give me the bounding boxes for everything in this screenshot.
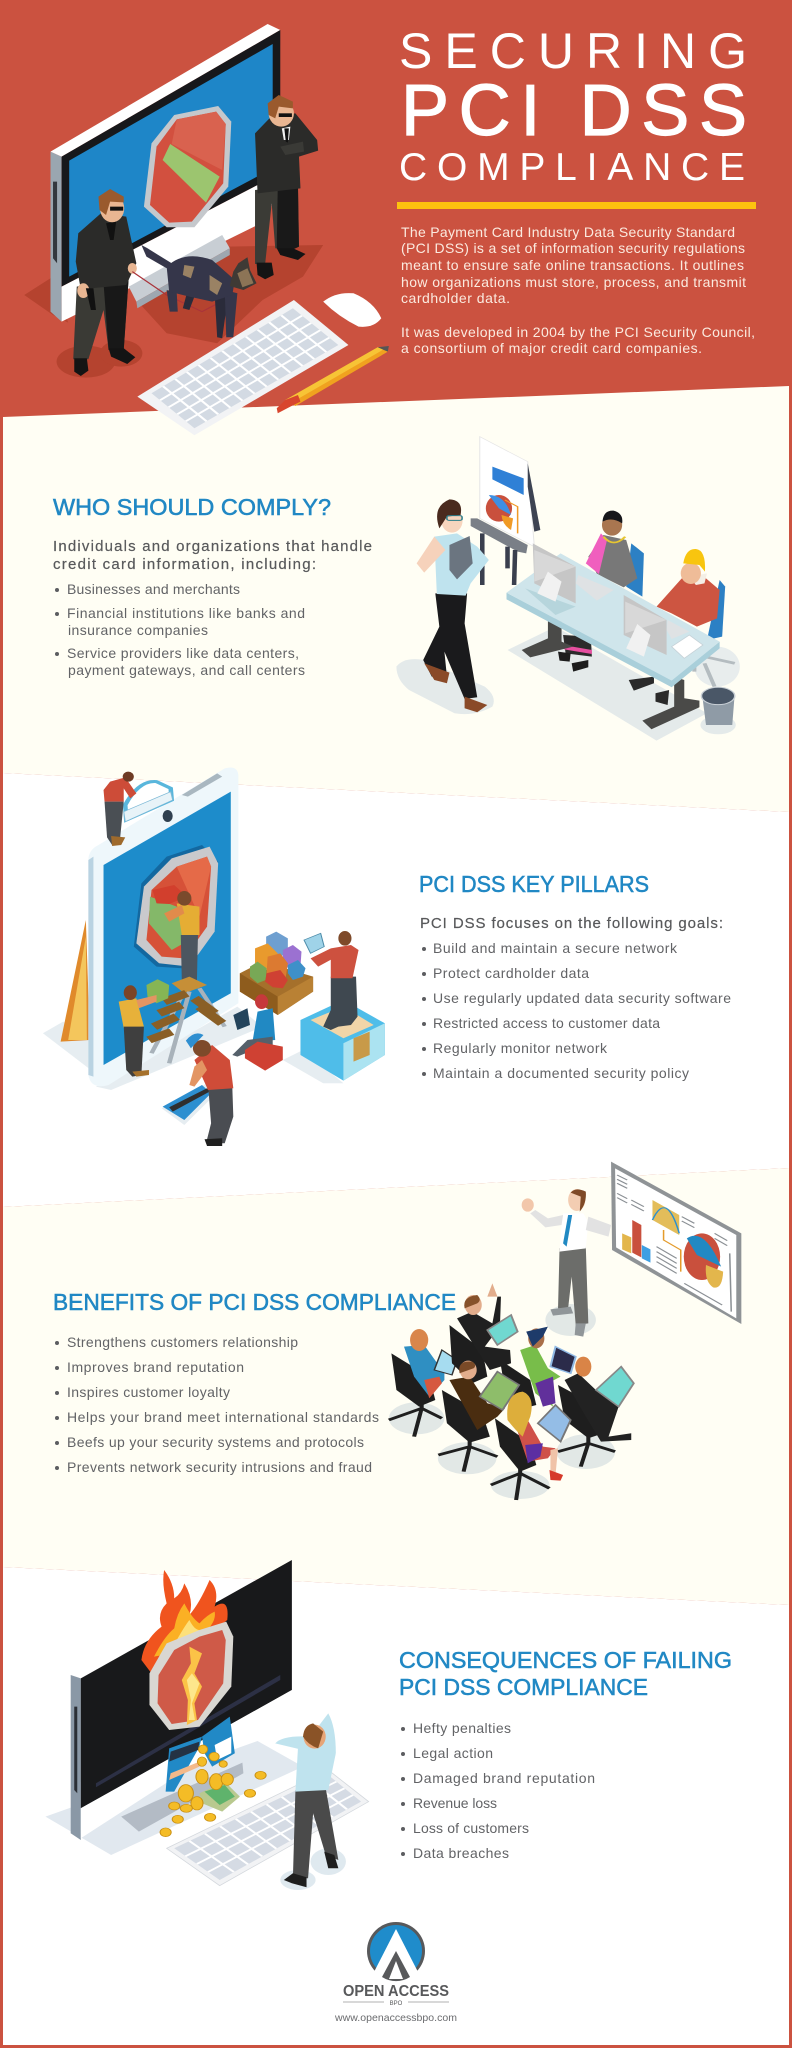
panel: who should comply background bbox=[3, 386, 789, 812]
credit card bbox=[163, 1085, 211, 1120]
monitor bbox=[71, 1560, 292, 1840]
heading: CONSEQUENCES OF FAILING bbox=[399, 1647, 732, 1673]
illustration: office team bbox=[396, 437, 740, 741]
logo mark bbox=[367, 1922, 425, 1984]
right guard bbox=[255, 95, 318, 279]
chairs behind desk bbox=[626, 543, 725, 640]
chair and person rear right bbox=[557, 1357, 634, 1469]
bullet list: Damaged brand reputation bbox=[413, 1770, 595, 1786]
title rule bbox=[397, 202, 756, 209]
monitor bbox=[50, 24, 280, 322]
pencil bbox=[277, 346, 389, 413]
bullet list: Regularly monitor network bbox=[433, 1040, 608, 1056]
subheading bbox=[53, 538, 372, 573]
illustration: burning shield monitor bbox=[45, 1560, 369, 1890]
bullet list bbox=[401, 1720, 595, 1861]
bullet list: Loss of customers bbox=[413, 1820, 529, 1836]
worker on block bbox=[300, 931, 385, 1081]
worried man bbox=[275, 1713, 346, 1890]
floor shadows bbox=[396, 627, 740, 741]
chair and person front left bbox=[389, 1329, 457, 1437]
heading: PCI DSS KEY PILLARS bbox=[419, 871, 649, 897]
heading: PCI DSS COMPLIANCE bbox=[399, 1674, 648, 1700]
stepladder bbox=[149, 977, 225, 1063]
bullet list bbox=[55, 1334, 379, 1475]
bullet list: Hefty penalties bbox=[413, 1720, 511, 1736]
bullet list: Beefs up your security systems and protocols bbox=[67, 1434, 364, 1450]
chair and person front bbox=[491, 1392, 571, 1500]
presentation board bbox=[611, 1162, 741, 1324]
section: key pillars text bbox=[419, 871, 731, 1081]
standing woman on phone bbox=[417, 499, 489, 712]
floor shadow bbox=[45, 1741, 303, 1855]
chair and person top bbox=[449, 1283, 518, 1383]
title: PCI DSS bbox=[401, 71, 747, 151]
desk monitors and keyboards bbox=[525, 543, 703, 658]
bullet list: Financial institutions like banks and bbox=[67, 605, 305, 621]
presenter bbox=[522, 1189, 611, 1337]
flip chart bbox=[471, 437, 540, 585]
title: COMPLIANCE bbox=[399, 146, 745, 189]
chair and person centre bbox=[438, 1361, 519, 1474]
box of cubes bbox=[240, 932, 313, 1015]
heading: WHO SHOULD COMPLY? bbox=[53, 494, 331, 520]
intro text bbox=[401, 224, 755, 356]
keyboard bbox=[167, 1770, 369, 1886]
bullet list bbox=[422, 940, 731, 1081]
waste bin bbox=[701, 687, 735, 725]
bullet list: Use regularly updated data security software bbox=[433, 990, 731, 1006]
left guard bbox=[73, 189, 137, 376]
intro text: meant to ensure safe online transactions. It outlines bbox=[401, 257, 744, 273]
subheading: PCI DSS focuses on the following goals: bbox=[420, 915, 723, 932]
mouse bbox=[323, 293, 381, 327]
easel bbox=[61, 920, 90, 1042]
shadows bbox=[24, 245, 323, 378]
subheading: Individuals and organizations that handle bbox=[53, 538, 372, 555]
team seated at laptops bbox=[389, 1283, 634, 1500]
shield bbox=[134, 845, 218, 968]
tablet bbox=[88, 767, 238, 1086]
flames bbox=[141, 1570, 228, 1673]
section: who should comply text bbox=[53, 494, 372, 678]
bullet list: Legal action bbox=[413, 1745, 493, 1761]
intro text: It was developed in 2004 by the PCI Security Council, bbox=[401, 324, 755, 340]
chair and person rear middle bbox=[500, 1327, 576, 1410]
section: consequences text bbox=[399, 1647, 732, 1861]
logo: Open Access BPO bbox=[334, 1922, 457, 2024]
bullet list: Prevents network security intrusions and fraud bbox=[67, 1459, 372, 1475]
worker on ladder bbox=[153, 885, 199, 983]
bullet list: Service providers like data centers, bbox=[67, 645, 299, 661]
bullet list: Build and maintain a secure network bbox=[433, 940, 678, 956]
illustration: presentation and team bbox=[389, 1162, 741, 1500]
title bbox=[399, 23, 747, 189]
intro text: cardholder data. bbox=[401, 290, 510, 306]
bullet list: Inspires customer loyalty bbox=[67, 1384, 230, 1400]
bullet list: Revenue loss bbox=[413, 1795, 497, 1811]
keyboard bbox=[137, 300, 348, 435]
bullet list: payment gateways, and call centers bbox=[68, 662, 305, 678]
bullet list: insurance companies bbox=[68, 622, 208, 638]
illustration: tablet construction team bbox=[43, 767, 385, 1146]
money and coins bbox=[160, 1745, 266, 1837]
heading bbox=[399, 1647, 732, 1700]
floor shadows bbox=[43, 1007, 343, 1125]
intro text: The Payment Card Industry Data Security Standard bbox=[401, 224, 735, 240]
bullet list: Strengthens customers relationship bbox=[67, 1334, 298, 1350]
section: benefits text bbox=[53, 1289, 456, 1475]
intro text: how organizations must store, process, and transmit bbox=[401, 274, 746, 290]
shield bbox=[144, 106, 231, 227]
bullet list bbox=[55, 581, 305, 678]
bullet list: Businesses and merchants bbox=[67, 581, 240, 597]
top worker with protractor bbox=[104, 772, 173, 846]
bullet list: Data breaches bbox=[413, 1845, 509, 1861]
cracked shield bbox=[149, 1622, 233, 1730]
seated worker with laptop bbox=[232, 994, 283, 1071]
bullet list: Helps your brand meet international standards bbox=[67, 1409, 379, 1425]
desk bbox=[507, 553, 720, 729]
website: www.openaccessbpo.com bbox=[334, 2012, 457, 2024]
bullet list: Restricted access to customer data bbox=[433, 1015, 660, 1031]
intro text: (PCI DSS) is a set of information security regulations bbox=[401, 240, 745, 256]
seated man bbox=[629, 549, 735, 705]
guard dog bbox=[132, 245, 257, 338]
bullet list: Maintain a documented security policy bbox=[433, 1065, 689, 1081]
title: SECURING bbox=[399, 23, 747, 79]
heading: BENEFITS OF PCI DSS COMPLIANCE bbox=[53, 1289, 456, 1315]
bullet list: Improves brand reputation bbox=[67, 1359, 244, 1375]
seated woman bbox=[558, 511, 637, 672]
panel: benefits background bbox=[3, 1168, 789, 1605]
worker with cap bbox=[186, 1033, 233, 1146]
panel: key pillars background bbox=[3, 773, 789, 1207]
worker with green cube bbox=[119, 979, 169, 1077]
intro text: a consortium of major credit card companies. bbox=[401, 340, 702, 356]
panel: consequences background bbox=[3, 1567, 789, 2045]
subheading: credit card information, including: bbox=[53, 556, 316, 573]
illustration: guarded monitor hero bbox=[24, 24, 389, 435]
logo underline: BPO bbox=[390, 2001, 403, 2007]
bullet list: Protect cardholder data bbox=[433, 965, 589, 981]
logo wordmark: OPEN ACCESS bbox=[343, 1983, 449, 2000]
broken credit card bbox=[166, 1717, 235, 1792]
